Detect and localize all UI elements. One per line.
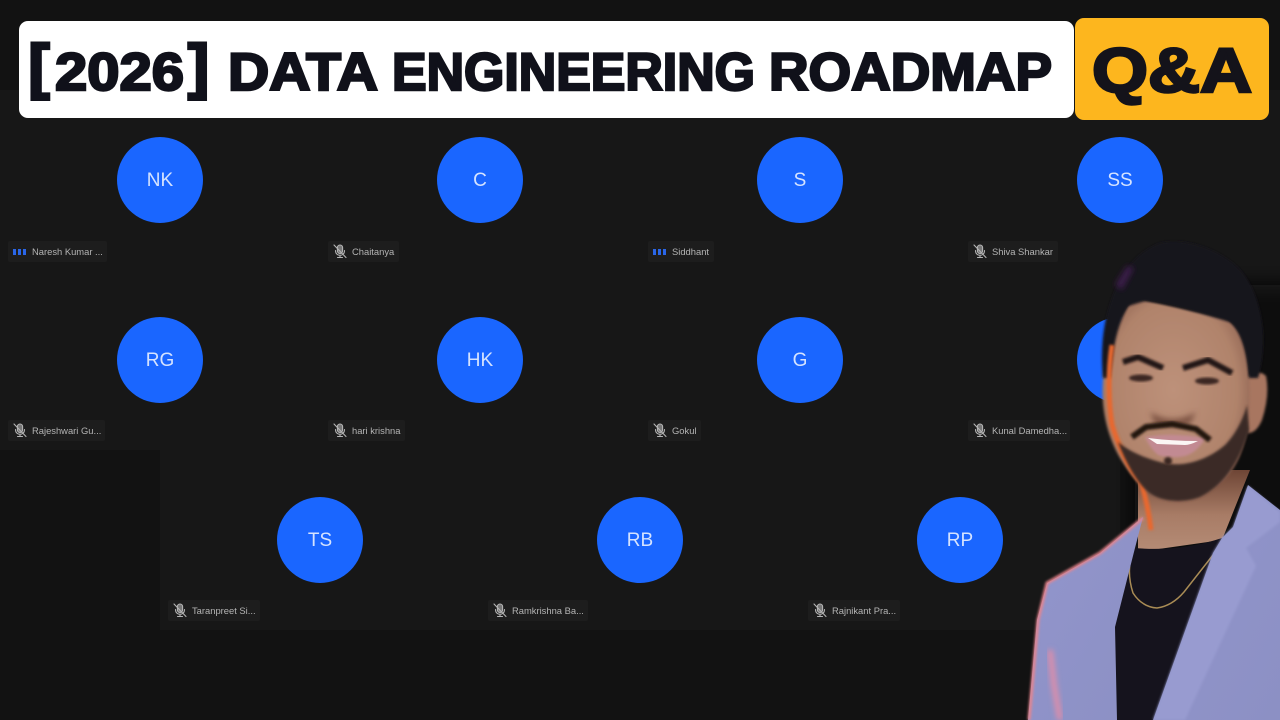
darker backdrop beside presenter	[1135, 285, 1280, 720]
tile: Shiva Shankar	[968, 137, 1163, 262]
name label Naresh Kumar: Naresh Kumar ...	[32, 246, 103, 257]
name label Siddhant: Siddhant	[672, 246, 709, 257]
title text: DATA	[228, 43, 378, 102]
neck	[1138, 470, 1250, 552]
title banner	[19, 21, 1074, 118]
jacket right	[1153, 485, 1280, 720]
avatar NK	[117, 137, 203, 223]
necklace	[1129, 555, 1213, 608]
avatar TS: TS	[308, 530, 332, 551]
row 3 tile background	[160, 450, 1120, 630]
avatar NK: NK	[147, 170, 174, 191]
title text: ROADMAP	[769, 43, 1052, 102]
name label Taranpreet	[168, 600, 260, 621]
name label Gokul	[648, 420, 701, 441]
title text	[28, 33, 1052, 102]
avatar HK: HK	[467, 350, 494, 371]
eye right	[1195, 378, 1219, 384]
avatar RB	[597, 497, 683, 583]
teeth	[1148, 438, 1198, 445]
name label Siddhant	[648, 241, 714, 262]
tile: Taranpreet	[168, 497, 363, 621]
tile: Rajnikant	[808, 497, 1003, 621]
avatar RG: RG	[146, 350, 174, 371]
avatar RP	[917, 497, 1003, 583]
name label Rajeshwari: Rajeshwari Gu...	[32, 425, 101, 436]
pink rim light	[1029, 518, 1143, 720]
name label Gokul: Gokul	[672, 425, 696, 436]
avatar C	[437, 137, 523, 223]
tile: hari krishna	[328, 317, 523, 441]
name label Shiva Shankar	[968, 241, 1058, 262]
avatar SS: SS	[1107, 170, 1133, 191]
name label Chaitanya	[328, 241, 399, 262]
hair tint	[1115, 266, 1134, 290]
tile: Ramkrishna	[488, 497, 683, 621]
name label Rajnikant	[808, 600, 900, 621]
tile: Rajeshwari	[8, 317, 203, 441]
avatar G: G	[793, 350, 807, 371]
title text: ]	[188, 33, 209, 100]
lips	[1145, 435, 1205, 457]
tile: Siddhant	[648, 137, 843, 262]
name label Taranpreet: Taranpreet Si...	[192, 605, 256, 616]
eyebrow right	[1183, 360, 1232, 373]
moustache	[1132, 424, 1210, 440]
row 1 tile background	[0, 90, 1280, 450]
avatar SS	[1077, 137, 1163, 223]
hidden participant avatar KD	[1077, 317, 1163, 403]
lapel highlight	[1153, 486, 1280, 720]
name label Naresh Kumar	[8, 241, 107, 262]
title text: [	[28, 33, 50, 100]
tile: Naresh Kumar	[8, 137, 203, 262]
orange rim on face	[1109, 345, 1151, 530]
beard	[1118, 405, 1249, 501]
tile: Kunal Damedha	[968, 420, 1070, 441]
name label Shiva Shankar: Shiva Shankar	[992, 246, 1053, 257]
jacket left	[1028, 517, 1143, 720]
name label Ramkrishna: Ramkrishna Ba...	[512, 605, 584, 616]
avatar RP: RP	[947, 530, 973, 551]
avatar HK	[437, 317, 523, 403]
presenter photo illustration	[1028, 241, 1280, 720]
participant grid	[0, 90, 1280, 630]
avatar RG	[117, 317, 203, 403]
ear	[1246, 372, 1267, 433]
tile: Chaitanya	[328, 137, 523, 262]
name label hari krishna: hari krishna	[352, 425, 401, 436]
title text: ENGINEERING	[392, 43, 755, 102]
name label Chaitanya: Chaitanya	[352, 246, 395, 257]
name label Ramkrishna	[488, 600, 588, 621]
name label Rajeshwari	[8, 420, 105, 441]
title text: 2026	[55, 43, 184, 102]
avatar TS	[277, 497, 363, 583]
face	[1103, 298, 1250, 502]
chin tuft	[1164, 457, 1172, 465]
Q&A badge	[1075, 18, 1269, 120]
name label Rajnikant: Rajnikant Pra...	[832, 605, 896, 616]
avatar RB: RB	[627, 530, 653, 551]
avatar C: C	[473, 170, 487, 191]
avatar G	[757, 317, 843, 403]
name label hari krishna	[328, 420, 405, 441]
hair	[1102, 241, 1263, 378]
tile: Gokul	[648, 317, 843, 441]
avatar S: S	[794, 170, 806, 191]
eye left	[1129, 374, 1153, 382]
pink inner streak	[1050, 650, 1060, 720]
t-shirt	[1115, 538, 1222, 720]
nose shadow	[1150, 412, 1196, 426]
eyebrow left	[1123, 357, 1163, 368]
avatar S	[757, 137, 843, 223]
Q&A text: Q&A	[1092, 36, 1252, 106]
name label Kunal Damedha: Kunal Damedha...	[992, 425, 1067, 436]
